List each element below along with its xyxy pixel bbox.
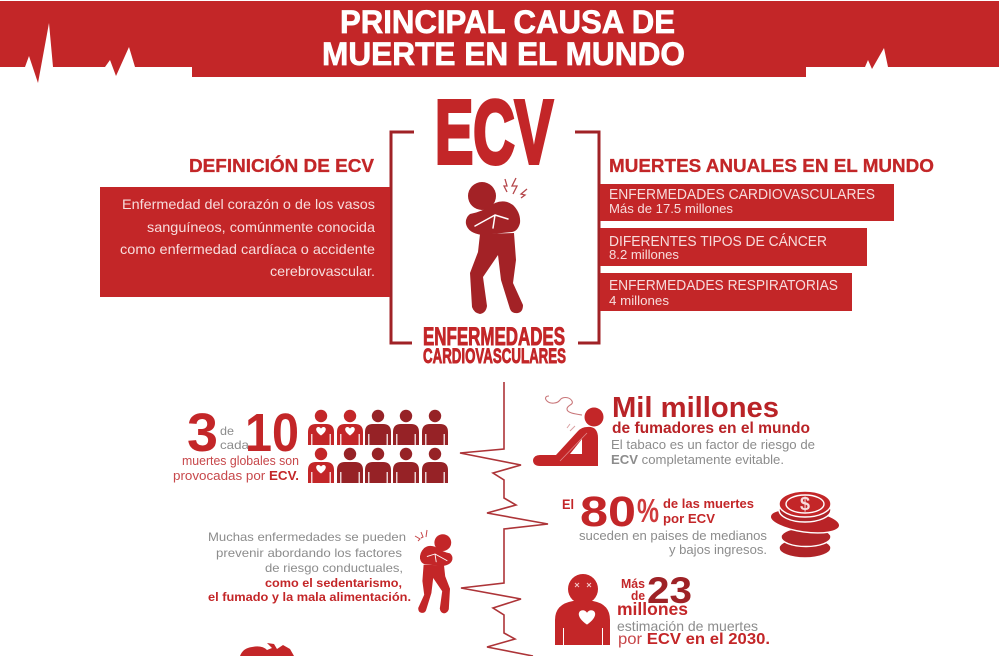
definition text: Enfermedad del corazón o de los vasos <box>122 196 375 212</box>
icon: pain sparks <box>504 178 527 198</box>
icon: coins <box>769 491 841 558</box>
text: prevention: de riesgo conductuales, <box>265 561 403 575</box>
subtitle: enfermedades cardiovasculares: CARDIOVASCULARES <box>423 345 566 368</box>
stat: 23 millones: millones <box>617 599 688 619</box>
bar: respiratory: 4 millones <box>609 294 669 308</box>
bar: cancer <box>600 228 867 266</box>
stat: 3 de cada 10: cada <box>220 438 249 452</box>
stat: mil millones: Mil millones <box>612 392 779 424</box>
text: prevention: como el sedentarismo, <box>265 576 402 590</box>
definition text: como enfermedad cardíaca o accidente <box>120 241 375 257</box>
text: prevention: Muchas enfermedades se pueden <box>208 530 406 544</box>
text: prevention: el fumado y la mala alimentación. <box>208 590 411 604</box>
stat: 23 millones: por ECV en el 2030. <box>618 631 770 648</box>
icon: person with heart and x eyes <box>555 574 610 645</box>
icon: partial figures at bottom <box>240 643 294 656</box>
title <box>322 4 685 72</box>
left bracket <box>391 132 414 343</box>
stat: 3 de cada 10: 10 <box>245 403 299 463</box>
stat: mil millones: de fumadores en el mundo <box>612 420 810 437</box>
stat: 3 de cada 10: de <box>220 424 234 438</box>
stat: 80 percent: y bajos ingresos. <box>669 542 767 557</box>
stat: 3 de cada 10: muertes globales son <box>182 454 299 468</box>
stat: 80 percent <box>562 488 767 557</box>
stat: mil millones <box>611 392 815 467</box>
stat: 80 percent: El <box>562 496 574 512</box>
panel: definition <box>100 155 390 297</box>
definition box <box>100 187 390 297</box>
heartbeat line <box>460 382 548 656</box>
ECV heading: ECV <box>435 83 553 183</box>
bar: cardiovascular <box>600 184 894 221</box>
stat: 80 percent: suceden en paises de medianos <box>579 528 767 543</box>
panel: ECV centre <box>391 83 599 368</box>
right bracket <box>575 132 599 343</box>
stat: mil millones: El tabaco es un factor de riesgo de <box>611 437 815 452</box>
header banner with heartbeat edge <box>0 1 999 83</box>
subtitle: enfermedades cardiovasculares <box>423 323 566 368</box>
text: prevention: prevenir abordando los factores <box>216 546 402 560</box>
title: PRINCIPAL CAUSA DE <box>340 4 675 40</box>
icon: person with chest pain <box>466 182 523 314</box>
subtitle: enfermedades cardiovasculares: ENFERMEDADES <box>423 323 565 351</box>
icon: person smoking <box>533 396 604 466</box>
definition text: cerebrovascular. <box>270 263 375 279</box>
bar: cardiovascular: ENFERMEDADES CARDIOVASCULARES <box>609 187 875 203</box>
heading: muertes anuales: MUERTES ANUALES EN EL MUNDO <box>609 156 934 176</box>
definition text <box>120 196 375 279</box>
panel: annual deaths <box>600 156 934 311</box>
text: prevention <box>208 530 411 604</box>
stat: 3 de cada 10: provocadas por ECV. <box>173 469 299 483</box>
stat: 80 percent: % <box>637 492 659 529</box>
heading: definición: DEFINICIÓN DE ECV <box>189 155 374 176</box>
bar: respiratory <box>600 273 852 311</box>
stat: 23 millones: de <box>631 588 645 603</box>
icon: coins: $ <box>800 494 810 514</box>
stat: 80 percent: 80 <box>580 488 636 536</box>
stat: 23 millones: 23 <box>647 570 692 611</box>
icon: small person with chest pain <box>415 530 452 613</box>
stat: 3 de cada 10 <box>173 403 299 483</box>
stat: 23 millones: Más <box>621 576 645 591</box>
stat: 80 percent: de las muertes <box>663 496 754 511</box>
stat: mil millones: ECV completamente evitable. <box>611 452 784 467</box>
stat: 23 millones: estimación de muertes <box>617 618 758 634</box>
bar: cardiovascular: Más de 17.5 millones <box>609 202 733 216</box>
stat: 23 millones <box>617 570 770 648</box>
stat: 3 de cada 10: 3 <box>187 403 218 463</box>
title: MUERTE EN EL MUNDO <box>322 36 685 72</box>
definition text: sanguíneos, comúnmente conocida <box>147 219 375 235</box>
stat: 80 percent: por ECV <box>663 511 715 526</box>
bar: cancer: DIFERENTES TIPOS DE CÁNCER <box>609 233 827 250</box>
bar: cancer: 8.2 millones <box>609 248 679 262</box>
bar: respiratory: ENFERMEDADES RESPIRATORIAS <box>609 278 838 294</box>
pictogram: ten people <box>308 410 448 483</box>
